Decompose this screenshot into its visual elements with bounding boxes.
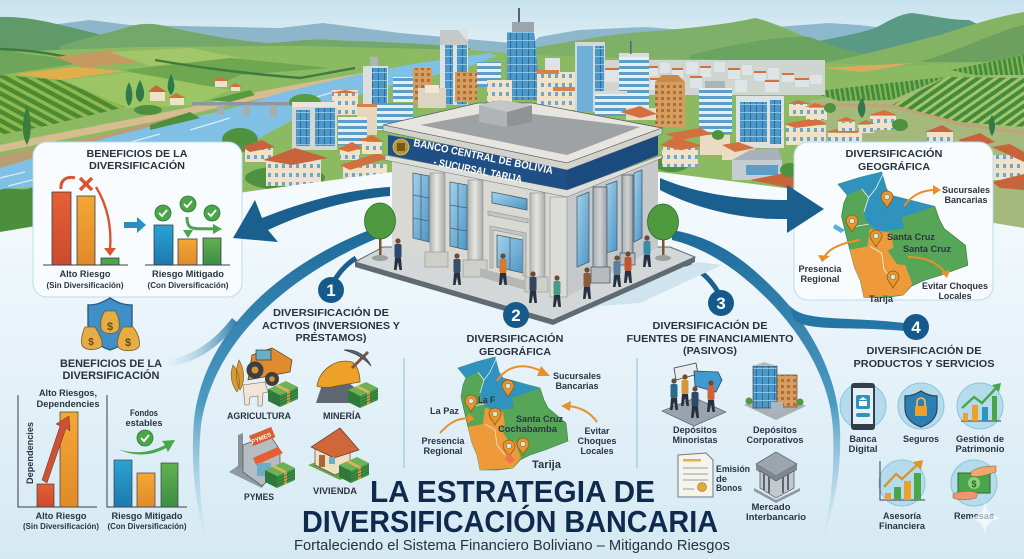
label: Banca (850, 434, 877, 445)
map labels: Evitar Choques (922, 281, 988, 292)
icon: shield with money bags (82, 298, 140, 351)
field base (0, 46, 1024, 240)
label (956, 434, 1005, 455)
number badge 4: 4 (911, 318, 921, 337)
map labels: Regional (424, 446, 462, 457)
label: Financiera (879, 521, 926, 532)
heading: GEOGRÁFICA (479, 345, 551, 358)
map labels: Presencia (798, 264, 842, 275)
bridge (192, 102, 292, 117)
label (716, 464, 750, 494)
map labels (798, 185, 990, 305)
label (672, 425, 718, 446)
chart labels (46, 269, 229, 290)
chart labels: (Con Diversificación) (148, 281, 229, 290)
heading: PRÉSTAMOS) (296, 331, 366, 344)
divider right (636, 358, 638, 468)
heading: DIVERSIFICACIÓN (466, 332, 564, 345)
map labels: Cochabamba (498, 424, 558, 435)
city houses with orange roofs (242, 100, 1024, 190)
heading: GEOGRÁFICA (858, 160, 930, 173)
icon: retail deposits (662, 363, 726, 426)
map of Bolivia (458, 357, 568, 470)
section 1: asset diversification (227, 277, 400, 502)
number badge 3: 3 (716, 294, 726, 313)
heading (854, 344, 994, 370)
label: Mercado (752, 502, 791, 513)
label: MINERÍA (323, 411, 362, 421)
label: VIVIENDA (313, 486, 358, 496)
blue fascia sign (385, 135, 662, 197)
heading: DIVERSIFICACIÓN (846, 147, 942, 160)
lower background panel (0, 172, 1024, 559)
label: Gestión de (956, 434, 1004, 445)
number badge 2 (503, 302, 529, 328)
heading (466, 332, 564, 358)
label (879, 511, 926, 532)
bank sign text: BANCO CENTRAL DE BOLIVIA (412, 137, 554, 177)
landscape: hills, fields, river (0, 12, 1024, 240)
heading (262, 306, 400, 344)
map labels: La Paz (430, 406, 459, 417)
icon: shield with money bags: $ (125, 337, 131, 349)
map labels: Regional (800, 274, 840, 285)
steps (480, 268, 526, 290)
map labels: Bancarias (556, 381, 598, 392)
arrows on map (440, 366, 597, 433)
label: Remesas (954, 511, 994, 522)
main title: DIVERSIFICACIÓN BANCARIA (302, 503, 718, 539)
heading: DIVERSIFICACIÓN (62, 369, 160, 382)
icon: corporate deposits (744, 362, 806, 420)
icon: bond certificate (678, 453, 713, 497)
map labels: Tarija (869, 294, 894, 305)
map labels (422, 371, 616, 471)
chart captions: Riesgo Mitigado (112, 511, 183, 522)
arrows on map (818, 185, 950, 278)
icon: interbank market (754, 452, 800, 503)
bank emblem (393, 139, 409, 155)
mitigated risk bars (145, 196, 230, 265)
map labels: Bancarias (944, 195, 988, 206)
heading: ACTIVOS (INVERSIONES Y (262, 320, 400, 332)
connector: branch to step 4 (790, 306, 905, 331)
map labels: Sucursales (553, 371, 601, 382)
label: PYMES (244, 492, 274, 502)
icon: remittances: $ (971, 479, 977, 489)
label: de (716, 474, 727, 485)
connector: benefits branch (168, 318, 238, 366)
chart: high risk dependencies: Alto Riesgos, (39, 388, 97, 398)
chart: high risk dependencies: Dependencies (36, 399, 100, 409)
panel: geographic diversification (top right) (794, 142, 993, 305)
map labels: Santa Cruz (887, 232, 935, 243)
icon: mining (316, 350, 378, 408)
icon: insurance shield (898, 383, 944, 429)
label: Bonos (716, 483, 742, 494)
distant city (600, 60, 825, 95)
chart labels: Riesgo Mitigado (152, 269, 224, 280)
label: Depósitos (753, 425, 797, 436)
chart labels: (Sin Diversificación) (46, 281, 124, 290)
section 2: geographic diversification (422, 302, 616, 471)
heading (846, 147, 942, 173)
map labels: Sucursales (942, 185, 990, 196)
walls (392, 158, 658, 297)
label: Depósitos (673, 425, 717, 436)
chart labels: Alto Riesgo (60, 269, 111, 280)
label: Interbancario (746, 512, 806, 523)
panel: benefits of diversification (top left) (33, 142, 242, 297)
subtitle: Fortaleciendo el Sistema Financiero Boliviano – Mitigando Riesgos (294, 537, 730, 554)
arrow: bank to geographic panel (660, 178, 824, 233)
central bank building (355, 100, 722, 325)
heading: BENEFICIOS DE LA (60, 358, 162, 370)
arrow: bank to benefits panel (233, 187, 390, 242)
divider left (403, 358, 405, 468)
map labels: Locales (938, 291, 972, 302)
map labels: Presencia (422, 436, 465, 447)
number badge 1 (318, 277, 344, 303)
people (394, 235, 651, 307)
connector: main left curve (193, 228, 378, 548)
icon: wealth management (957, 383, 1003, 429)
label: Minoristas (672, 435, 718, 446)
connector: to step 1 (332, 258, 356, 285)
main title (302, 474, 718, 539)
map labels: La F (478, 395, 495, 406)
number badge 3 (708, 290, 734, 316)
chart captions (23, 511, 187, 531)
icon: house (308, 428, 369, 483)
heading: BENEFICIOS DE LA (86, 148, 188, 160)
chart captions: Alto Riesgo (36, 511, 87, 522)
sky background (0, 0, 1024, 240)
chart: mitigated risk stable funds: Fondos (130, 408, 158, 418)
icon: financial advisory (879, 460, 925, 506)
label: Corporativos (746, 435, 804, 446)
icon: digital banking (840, 383, 886, 430)
connector: to step 3 (680, 262, 718, 292)
map labels: Locales (580, 446, 614, 457)
chart: mitigated risk stable funds: estables (126, 418, 162, 428)
connector: right curve (672, 230, 840, 548)
heading: PRODUCTOS Y SERVICIOS (854, 358, 994, 370)
label: AGRICULTURA (227, 411, 291, 421)
map labels: Choques (578, 436, 616, 447)
label: Patrimonio (956, 444, 1005, 455)
icon: shield with money bags: $ (107, 321, 113, 333)
map labels: Santa Cruz (903, 244, 951, 255)
blue arrow between charts (124, 217, 146, 233)
label (746, 425, 804, 446)
number badge 1: 1 (326, 281, 336, 300)
chart captions: (Con Diversificación) (108, 522, 187, 531)
map labels: Santa Cruz (516, 414, 563, 425)
heading: DIVERSIFICACIÓN DE (866, 344, 982, 357)
left columns (425, 173, 567, 297)
main title: LA ESTRATEGIA DE (370, 474, 655, 509)
heading: DIVERSIFICACIÓN DE (652, 319, 768, 332)
section 4: products and services (840, 314, 1005, 535)
icon: SME factory shop (229, 427, 295, 488)
high risk bars (43, 177, 128, 265)
heading: DIVERSIFICACIÓN DE (273, 306, 389, 319)
bank sign text: - SUCURSAL TARIJA (432, 156, 523, 186)
roof (383, 100, 662, 170)
icon: SME factory shop: PYMES (251, 432, 272, 446)
panel: left benefits column (18, 298, 187, 531)
map labels: Tarija (532, 459, 562, 471)
label: Digital (848, 444, 878, 455)
label: Emisión (716, 464, 750, 475)
tree right (648, 204, 678, 261)
icon: shield with money bags: $ (88, 337, 94, 348)
heading: (PASIVOS) (683, 345, 737, 357)
trees and farmhouses (23, 74, 995, 190)
icon: remittances (951, 460, 997, 506)
left facade windows (413, 173, 527, 273)
map labels: Evitar (584, 426, 610, 437)
label: Seguros (903, 434, 939, 445)
heading (86, 148, 188, 172)
chart: high risk dependencies: Dependencies (25, 422, 35, 484)
heading: FUENTES DE FINANCIAMIENTO (626, 333, 794, 345)
section 3: funding sources (626, 290, 806, 523)
label (746, 502, 806, 523)
city skyline buildings (292, 8, 784, 150)
tree left (364, 203, 396, 261)
right fields (810, 72, 1024, 240)
chart: mitigated risk stable funds (107, 395, 187, 507)
icon: agriculture (231, 348, 298, 407)
number badge 2: 2 (511, 306, 521, 325)
label: Asesoría (883, 511, 922, 522)
heading (60, 358, 162, 382)
number badge 4 (903, 314, 929, 340)
door frame (488, 211, 528, 276)
map of Bolivia (833, 172, 968, 297)
right facade windows and columns (577, 170, 642, 283)
label (848, 434, 878, 455)
decorative sparkle (969, 501, 1001, 535)
heading (626, 319, 794, 357)
chart: high risk dependencies (18, 388, 100, 507)
platform (355, 247, 722, 325)
heading: DIVERSIFICACIÓN (89, 159, 185, 172)
chart captions: (Sin Diversificación) (23, 522, 99, 531)
